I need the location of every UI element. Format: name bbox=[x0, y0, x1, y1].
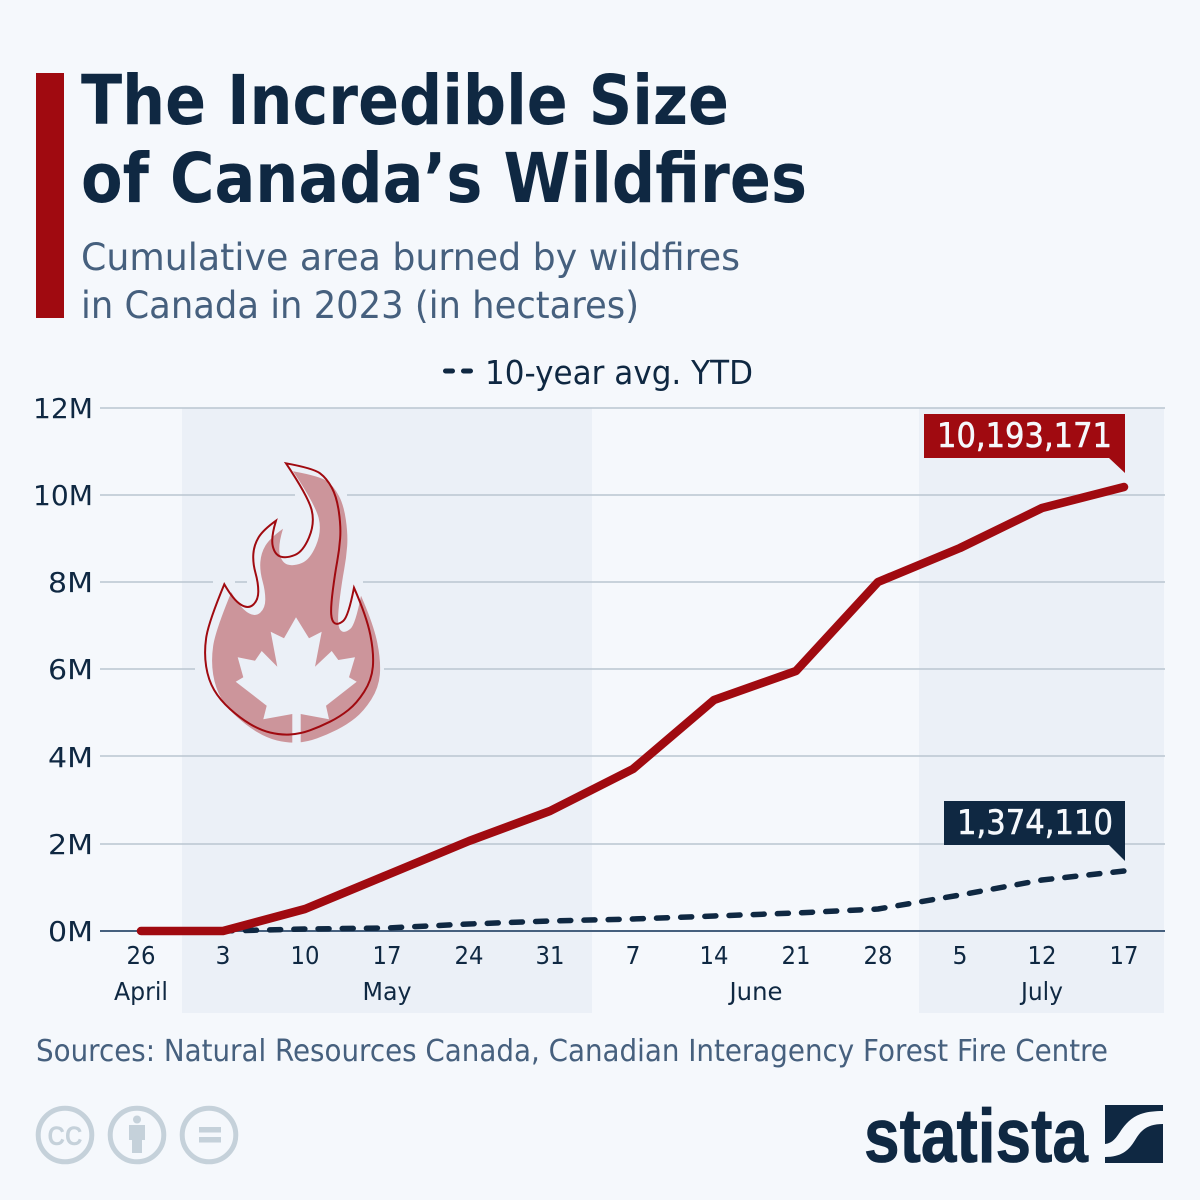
icon: no derivatives bbox=[182, 1108, 236, 1162]
icon: creative commons: CC bbox=[48, 1121, 82, 1151]
x axis day labels: 5 bbox=[952, 941, 968, 970]
x axis month labels: April bbox=[114, 977, 168, 1006]
x axis day labels: 24 bbox=[454, 941, 484, 970]
x axis day labels: 26 bbox=[126, 941, 156, 970]
callout: 2023 value bbox=[924, 414, 1125, 473]
statista wordmark: statista bbox=[864, 1094, 1089, 1179]
callout: 10-year average value bbox=[944, 801, 1125, 861]
y axis labels bbox=[33, 392, 93, 948]
shaded month band: July bbox=[919, 408, 1164, 1013]
x axis day labels: 14 bbox=[700, 941, 728, 970]
title: of Canada’s Wildfires bbox=[81, 139, 807, 219]
x axis month labels: July bbox=[1019, 977, 1063, 1006]
x axis day labels: 21 bbox=[782, 941, 810, 970]
line: 2023 area burned bbox=[141, 487, 1124, 931]
accent bar bbox=[36, 73, 64, 318]
x axis day labels: 17 bbox=[372, 941, 402, 970]
subtitle bbox=[81, 236, 740, 327]
legend: 10-year average: 10-year avg. YTD bbox=[485, 353, 753, 392]
x axis day labels: 10 bbox=[290, 941, 320, 970]
y axis labels: 12M bbox=[33, 392, 93, 425]
x axis day labels: 7 bbox=[626, 941, 640, 970]
source note: Sources: Natural Resources Canada, Canadian Interagency Forest Fire Centre bbox=[36, 1034, 1108, 1069]
x axis month labels: May bbox=[362, 977, 412, 1006]
x axis day labels: 28 bbox=[864, 941, 892, 970]
title: The Incredible Size bbox=[81, 61, 729, 141]
y axis labels: 0M bbox=[48, 915, 93, 948]
x axis day labels: 12 bbox=[1028, 941, 1056, 970]
shaded month band: May bbox=[182, 408, 592, 1013]
x axis day labels: 17 bbox=[1110, 941, 1138, 970]
y axis labels: 6M bbox=[48, 653, 93, 686]
y axis labels: 4M bbox=[48, 741, 93, 774]
callout: 10-year average value: 1,374,110 bbox=[957, 803, 1113, 843]
line: 10-year average bbox=[223, 871, 1124, 931]
x axis day labels bbox=[126, 941, 1138, 970]
x axis month labels bbox=[114, 977, 1063, 1006]
subtitle: Cumulative area burned by wildfires bbox=[81, 236, 740, 279]
x axis month labels: June bbox=[728, 977, 782, 1006]
callout: 2023 value: 10,193,171 bbox=[937, 416, 1112, 456]
statista logo mark bbox=[1105, 1105, 1163, 1163]
x axis day labels: 3 bbox=[216, 941, 230, 970]
icon: attribution bbox=[110, 1108, 164, 1162]
y axis labels: 10M bbox=[33, 479, 93, 512]
icon: flame with maple leaf bbox=[205, 463, 380, 743]
x axis baseline bbox=[100, 930, 1165, 932]
x axis day labels: 31 bbox=[536, 941, 564, 970]
icon: creative commons bbox=[38, 1108, 92, 1162]
subtitle: in Canada in 2023 (in hectares) bbox=[81, 284, 639, 327]
y axis labels: 8M bbox=[48, 566, 93, 599]
title bbox=[81, 61, 807, 219]
y axis labels: 2M bbox=[48, 828, 93, 861]
